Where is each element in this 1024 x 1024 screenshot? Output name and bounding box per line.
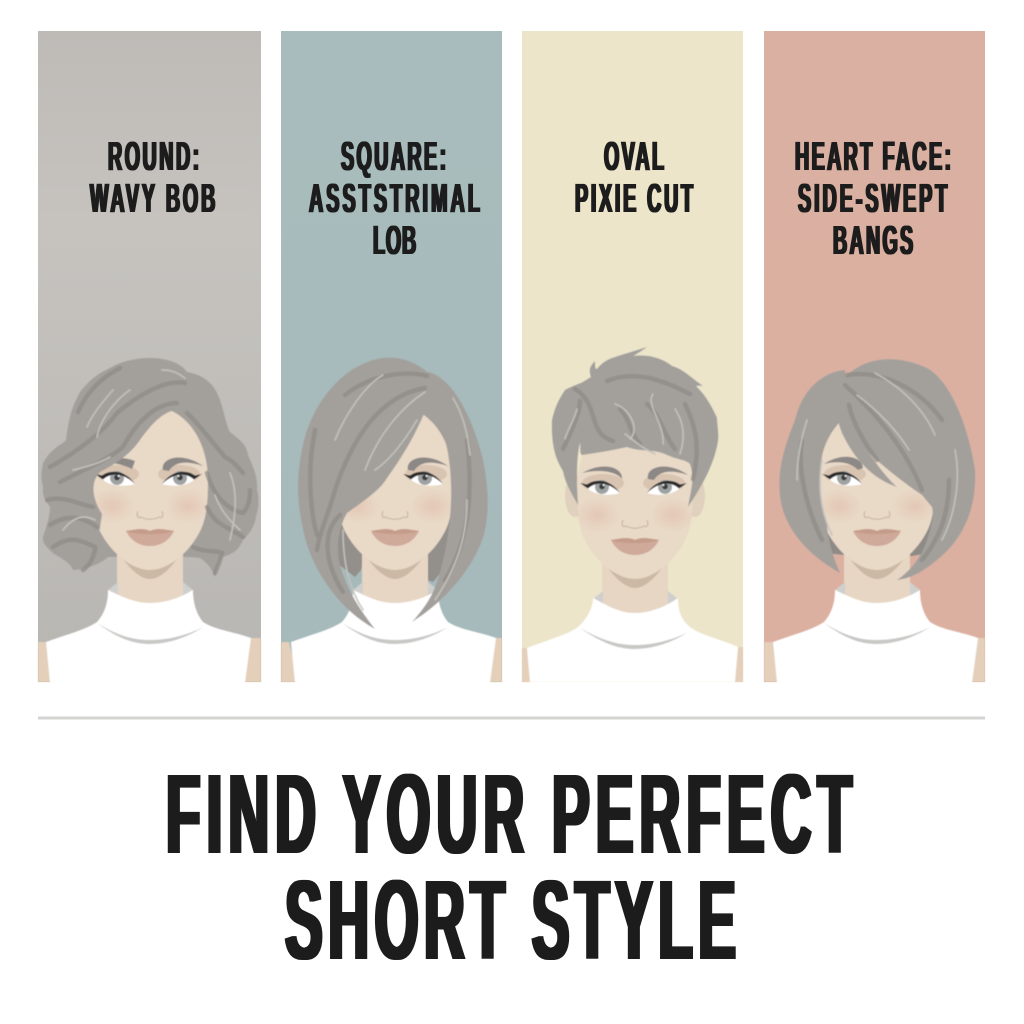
panel background (522, 31, 743, 682)
label: square lob: LOB (373, 217, 416, 263)
panel background (764, 31, 985, 682)
panel: heart face, side-swept bangs (764, 31, 985, 683)
title: SHORT STYLE (285, 857, 736, 983)
label: heart face side-swept bangs: BANGS (833, 217, 913, 263)
portrait: pixie cut (522, 347, 743, 682)
panel background (38, 31, 261, 682)
label: oval pixie cut: PIXIE CUT (575, 175, 693, 221)
label: oval pixie cut (575, 133, 693, 221)
divider line (38, 716, 985, 720)
title (166, 751, 852, 983)
label: heart face side-swept bangs: HEART FACE: (795, 133, 951, 179)
title: FIND YOUR PERFECT (166, 751, 852, 877)
panel: square face, lob (281, 31, 502, 683)
label: square lob (309, 133, 480, 263)
label: heart face side-swept bangs (795, 133, 951, 263)
portrait: wavy bob (38, 358, 261, 683)
label: round wavy bob (90, 133, 215, 221)
portrait: side-swept bangs (764, 359, 985, 683)
label: round wavy bob: ROUND: (108, 133, 199, 179)
panel background (281, 31, 502, 682)
label: square lob: ASSTSTRIMAL (309, 175, 480, 221)
label: oval pixie cut: OVAL (604, 133, 664, 179)
label: square lob: SQUARE: (341, 133, 446, 179)
panel: oval face, pixie cut (522, 31, 743, 682)
portrait: asymmetrical lob (281, 358, 502, 683)
panel: round face, wavy bob (38, 31, 261, 683)
label: round wavy bob: WAVY BOB (90, 175, 215, 221)
label: heart face side-swept bangs: SIDE-SWEPT (798, 175, 947, 221)
